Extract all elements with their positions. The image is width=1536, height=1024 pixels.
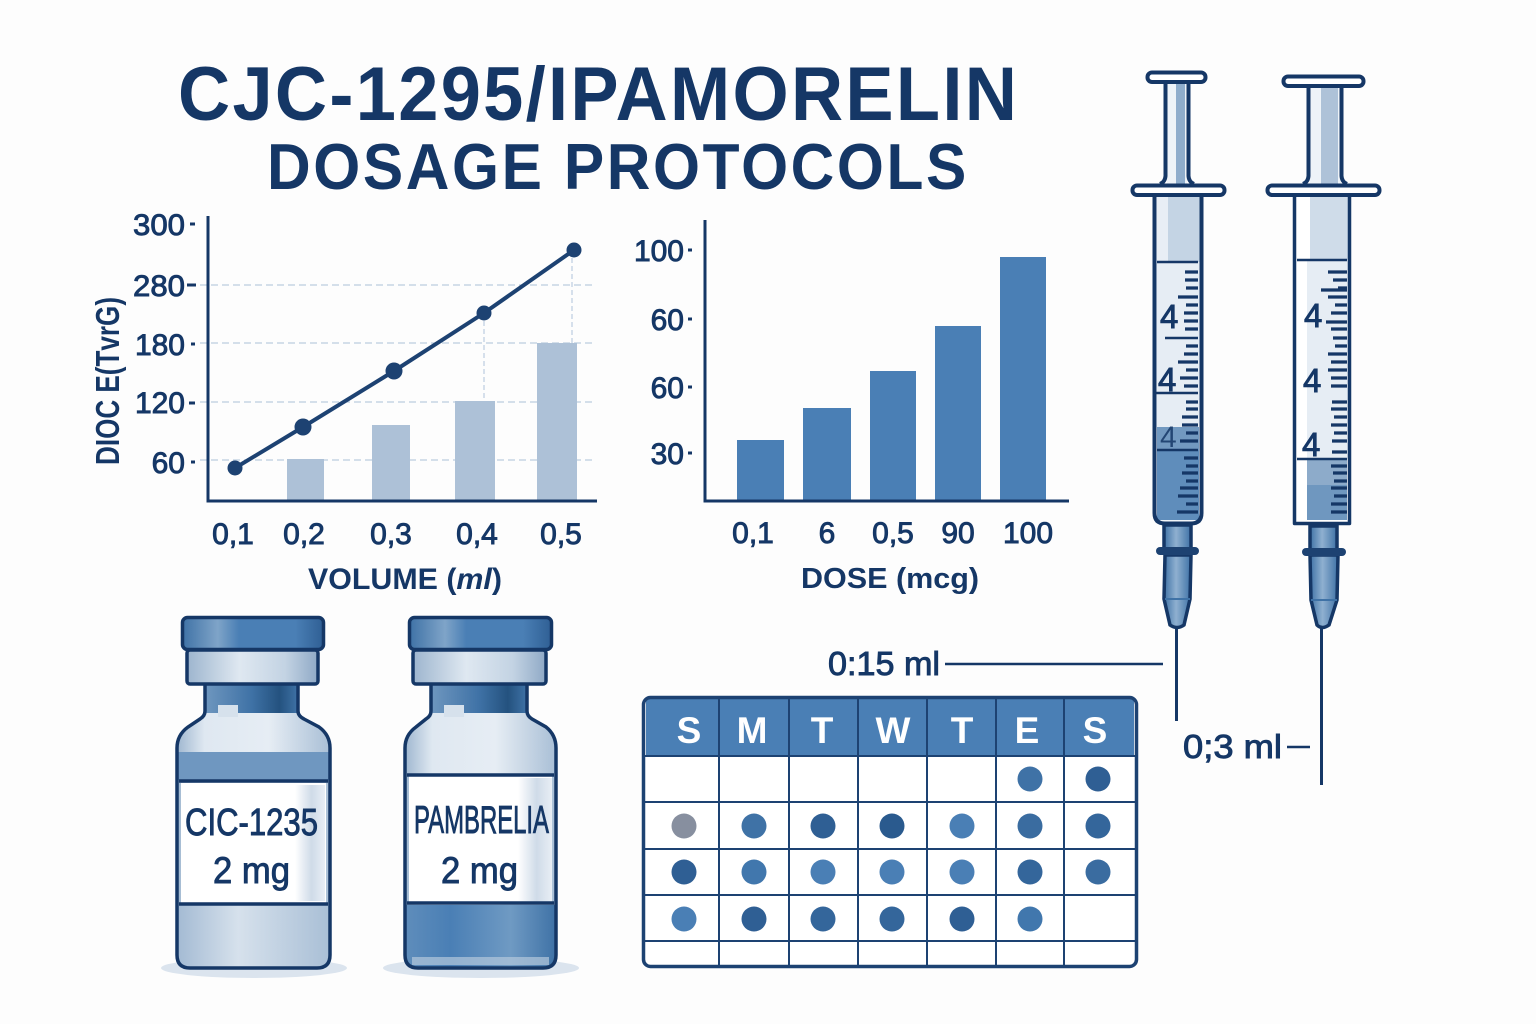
y tick labels: 60 xyxy=(152,447,185,480)
barrel: 4 xyxy=(1160,421,1177,454)
needle xyxy=(1175,628,1178,721)
y tick labels: 30 xyxy=(651,438,684,471)
axes xyxy=(208,216,597,501)
x axis title: VOLUME (ml) xyxy=(308,563,502,596)
shadow xyxy=(161,958,347,978)
x tick labels: 0,1 xyxy=(732,517,774,550)
x tick labels: 0,5 xyxy=(540,518,582,551)
y tick labels: 100 xyxy=(634,235,684,268)
calendar xyxy=(644,698,1136,966)
y tick labels: 120 xyxy=(135,387,185,420)
weekday letters: S xyxy=(677,710,701,751)
collar xyxy=(413,650,546,684)
scale ticks xyxy=(1321,272,1347,512)
line and bar chart: dose vs volume xyxy=(89,209,597,596)
needle xyxy=(1320,628,1323,785)
vial: CJC-1235 xyxy=(161,618,347,978)
y tick labels: 300 xyxy=(133,209,185,242)
label xyxy=(409,776,552,902)
y tick labels: 180 xyxy=(135,329,185,362)
x tick labels: 90 xyxy=(941,517,975,550)
calendar body xyxy=(644,698,1136,966)
outline xyxy=(177,685,330,968)
barrel xyxy=(1268,186,1380,524)
barrel xyxy=(1132,186,1224,524)
weekday letters: T xyxy=(811,710,834,751)
grid xyxy=(645,699,1136,966)
weekday letters: T xyxy=(951,710,974,751)
bar chart: dose xyxy=(634,220,1069,595)
weekday letters: S xyxy=(1083,710,1107,751)
y tick labels: 60 xyxy=(651,372,684,405)
scale ticks xyxy=(1177,272,1198,512)
x tick labels: 0,2 xyxy=(283,518,325,551)
needle hub xyxy=(1302,526,1346,628)
x tick labels: 0,3 xyxy=(370,518,412,551)
plunger xyxy=(1148,72,1206,184)
axes xyxy=(705,220,1069,501)
data line xyxy=(228,242,582,476)
weekday letters: E xyxy=(1015,710,1039,751)
y axis title: DIOC E(TvrG) xyxy=(89,297,126,465)
weekday letters: M xyxy=(737,710,767,751)
barrel: 4 xyxy=(1303,362,1321,399)
x tick labels xyxy=(732,517,1053,550)
title xyxy=(178,51,1017,203)
title line 2: DOSAGE PROTOCOLS xyxy=(267,131,966,203)
label xyxy=(181,783,326,903)
title line 1: CJC-1295/IPAMORELIN xyxy=(178,51,1017,136)
barrel: 4 xyxy=(1158,361,1176,398)
glass body xyxy=(177,685,330,968)
collar xyxy=(187,650,318,684)
label text: CIC-1235 xyxy=(185,802,318,844)
syringe 1 xyxy=(1132,72,1224,721)
y tick labels: 60 xyxy=(651,304,684,337)
outline xyxy=(405,685,556,968)
weekday letters: W xyxy=(876,710,911,751)
x tick labels: 0,4 xyxy=(456,518,498,551)
frame xyxy=(644,698,1136,966)
x axis title: DOSE (mcg) xyxy=(801,563,979,595)
x tick labels xyxy=(212,518,582,551)
needle hub xyxy=(1156,525,1199,628)
bars xyxy=(737,257,1046,501)
x tick labels: 0,5 xyxy=(872,517,914,550)
scale numerals: 4 xyxy=(1304,297,1322,334)
label text: PAMBRELIA xyxy=(414,799,549,842)
x tick labels: 100 xyxy=(1003,517,1053,550)
bars xyxy=(287,343,577,500)
vial: Pambrelia: 2 mg xyxy=(441,850,518,891)
grid lines xyxy=(200,285,592,460)
y tick labels: 280 xyxy=(133,270,185,303)
syringe 2 xyxy=(1268,76,1380,785)
weekday letters xyxy=(677,710,1107,751)
vial: CJC-1235: 2 mg xyxy=(213,850,290,891)
plunger xyxy=(1284,76,1364,184)
x tick labels: 6 xyxy=(819,517,835,550)
dose dots xyxy=(672,766,1110,932)
cap xyxy=(410,618,552,650)
glass body xyxy=(405,685,556,968)
scale numerals: 4 xyxy=(1160,298,1178,335)
y tick labels xyxy=(634,235,684,471)
callout: 0;3 ml: 0;3 ml xyxy=(1183,728,1282,765)
header band xyxy=(646,699,1134,756)
cap xyxy=(182,618,324,650)
vial: Pambrelia xyxy=(383,618,579,978)
barrel: 4 xyxy=(1302,426,1320,463)
x tick labels: 0,1 xyxy=(212,518,254,551)
shadow xyxy=(383,958,579,978)
callout: 0:15 ml: 0:15 ml xyxy=(828,645,940,682)
y tick labels xyxy=(133,209,185,480)
